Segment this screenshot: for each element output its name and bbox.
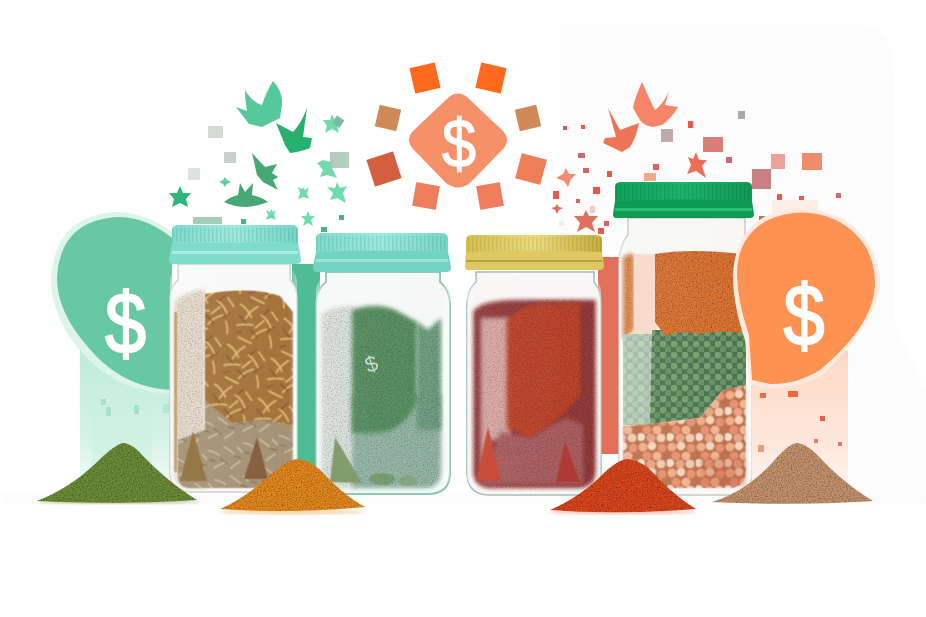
jar 4: green lid with layered lentils and spices [613,182,754,495]
dark red base [473,300,596,488]
lid [316,233,448,254]
lid [172,225,298,246]
spice pile: tan powder [712,443,873,504]
jar 2: teal lid with green herbs [313,233,451,494]
right herb strip [417,318,441,430]
bubble body [737,212,875,384]
spice pile: orange turmeric [220,459,365,514]
dark herb patch [352,306,417,433]
spice pile: green herb [37,443,198,504]
jar 3: gold lid with red spice [465,235,604,495]
small dollar mark: $ [361,350,381,378]
lid [615,182,752,203]
green mix [352,395,441,488]
left orange edge [622,254,634,340]
fade band under orange bubble [752,350,848,490]
pale peach band [634,254,657,336]
dollar sign: $ [783,267,825,363]
panel: sun icon with dollar sign [366,62,547,210]
bubble halo [733,209,880,388]
dollar sign: $ [105,275,146,371]
spice pile: red chili [548,459,696,514]
panel: green price bubble with dollar sign [51,212,172,484]
orange powder [655,251,742,336]
glass [170,264,297,492]
pale herb [321,306,354,488]
glass [316,272,450,494]
peach beads [623,385,746,488]
pale pink band [481,318,510,478]
golden seeds [205,290,293,425]
bright red centre [507,303,580,437]
bubble halo [51,212,172,394]
pale seeds [174,290,205,488]
panel: coloured backdrop strips between jars [292,257,622,466]
panel: orange price bubble with dollar sign [733,200,880,490]
green peas [650,330,746,424]
lid [466,235,602,254]
icons: green birds, leaves and stars [169,81,349,232]
pale lentils [623,334,660,425]
lower seed mix [178,400,293,488]
bubble body [57,217,172,390]
dollar sign: $ [442,105,476,182]
diamond [409,94,507,188]
fade band under green bubble [80,350,172,484]
icons: orange birds, stars and confetti [551,82,841,234]
jar 1: teal lid with brown seeds [169,225,301,492]
lower pink powder [482,418,583,484]
glass [467,272,601,495]
glass [619,218,752,495]
